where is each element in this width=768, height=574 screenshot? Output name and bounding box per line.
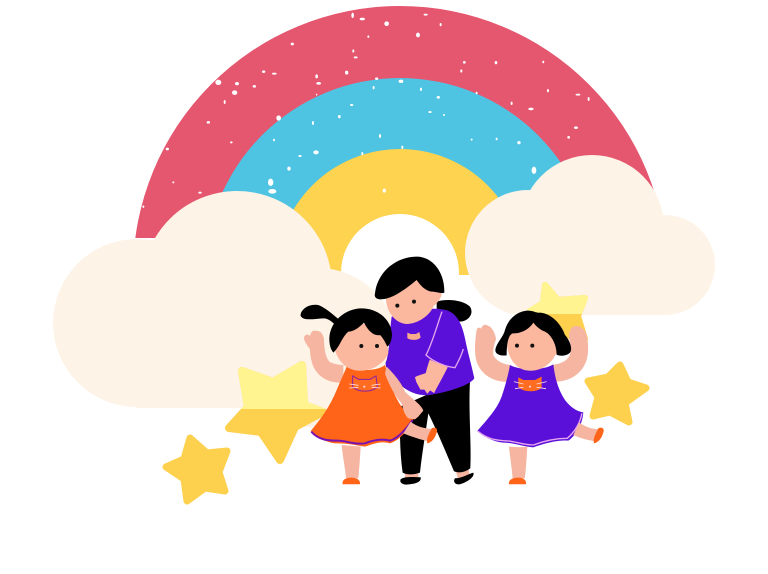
child shoes (343, 428, 437, 484)
right cloud (465, 155, 715, 316)
child dress (477, 364, 583, 447)
mother sleeve seam (426, 312, 463, 368)
child legs (342, 445, 361, 478)
child eyes (359, 344, 379, 348)
child face (335, 323, 388, 371)
characters (301, 257, 604, 485)
child ponytail (301, 305, 342, 328)
rainbow (135, 6, 654, 275)
mother cat patch (407, 332, 421, 340)
child ear (551, 347, 559, 355)
left cloud (53, 191, 398, 428)
child arms raised (475, 325, 512, 382)
child shoes (509, 428, 604, 484)
child dress hem (478, 413, 582, 445)
mother eyes (395, 300, 416, 308)
mother ankles (405, 468, 470, 480)
rainbow outer bands (135, 6, 654, 238)
child hair (495, 311, 571, 356)
cat on dress (514, 377, 547, 391)
star: right (588, 365, 646, 422)
star: behind right child (530, 285, 585, 349)
mother shirt (386, 309, 474, 395)
mother (375, 257, 474, 485)
child face (507, 323, 557, 371)
rainbow inner bands (294, 149, 498, 275)
mother face (386, 280, 442, 324)
child arm (385, 367, 423, 419)
child hair (329, 308, 392, 353)
mother ponytail (437, 300, 472, 322)
mother shoes (400, 473, 474, 485)
child dress hem (311, 420, 413, 444)
child legs (509, 447, 527, 478)
cat on dress (349, 376, 381, 391)
child eyes (515, 344, 534, 348)
left child in orange dress (301, 305, 437, 484)
star: small bottom left (166, 438, 227, 501)
child arm raised (304, 330, 343, 383)
mother trousers (400, 382, 471, 474)
child dress (311, 365, 413, 447)
mother arm and hand (415, 360, 447, 393)
right child in purple dress (475, 311, 604, 484)
mother hair (375, 257, 444, 299)
star: large centre (229, 365, 323, 460)
rainbow speckles (142, 13, 590, 208)
